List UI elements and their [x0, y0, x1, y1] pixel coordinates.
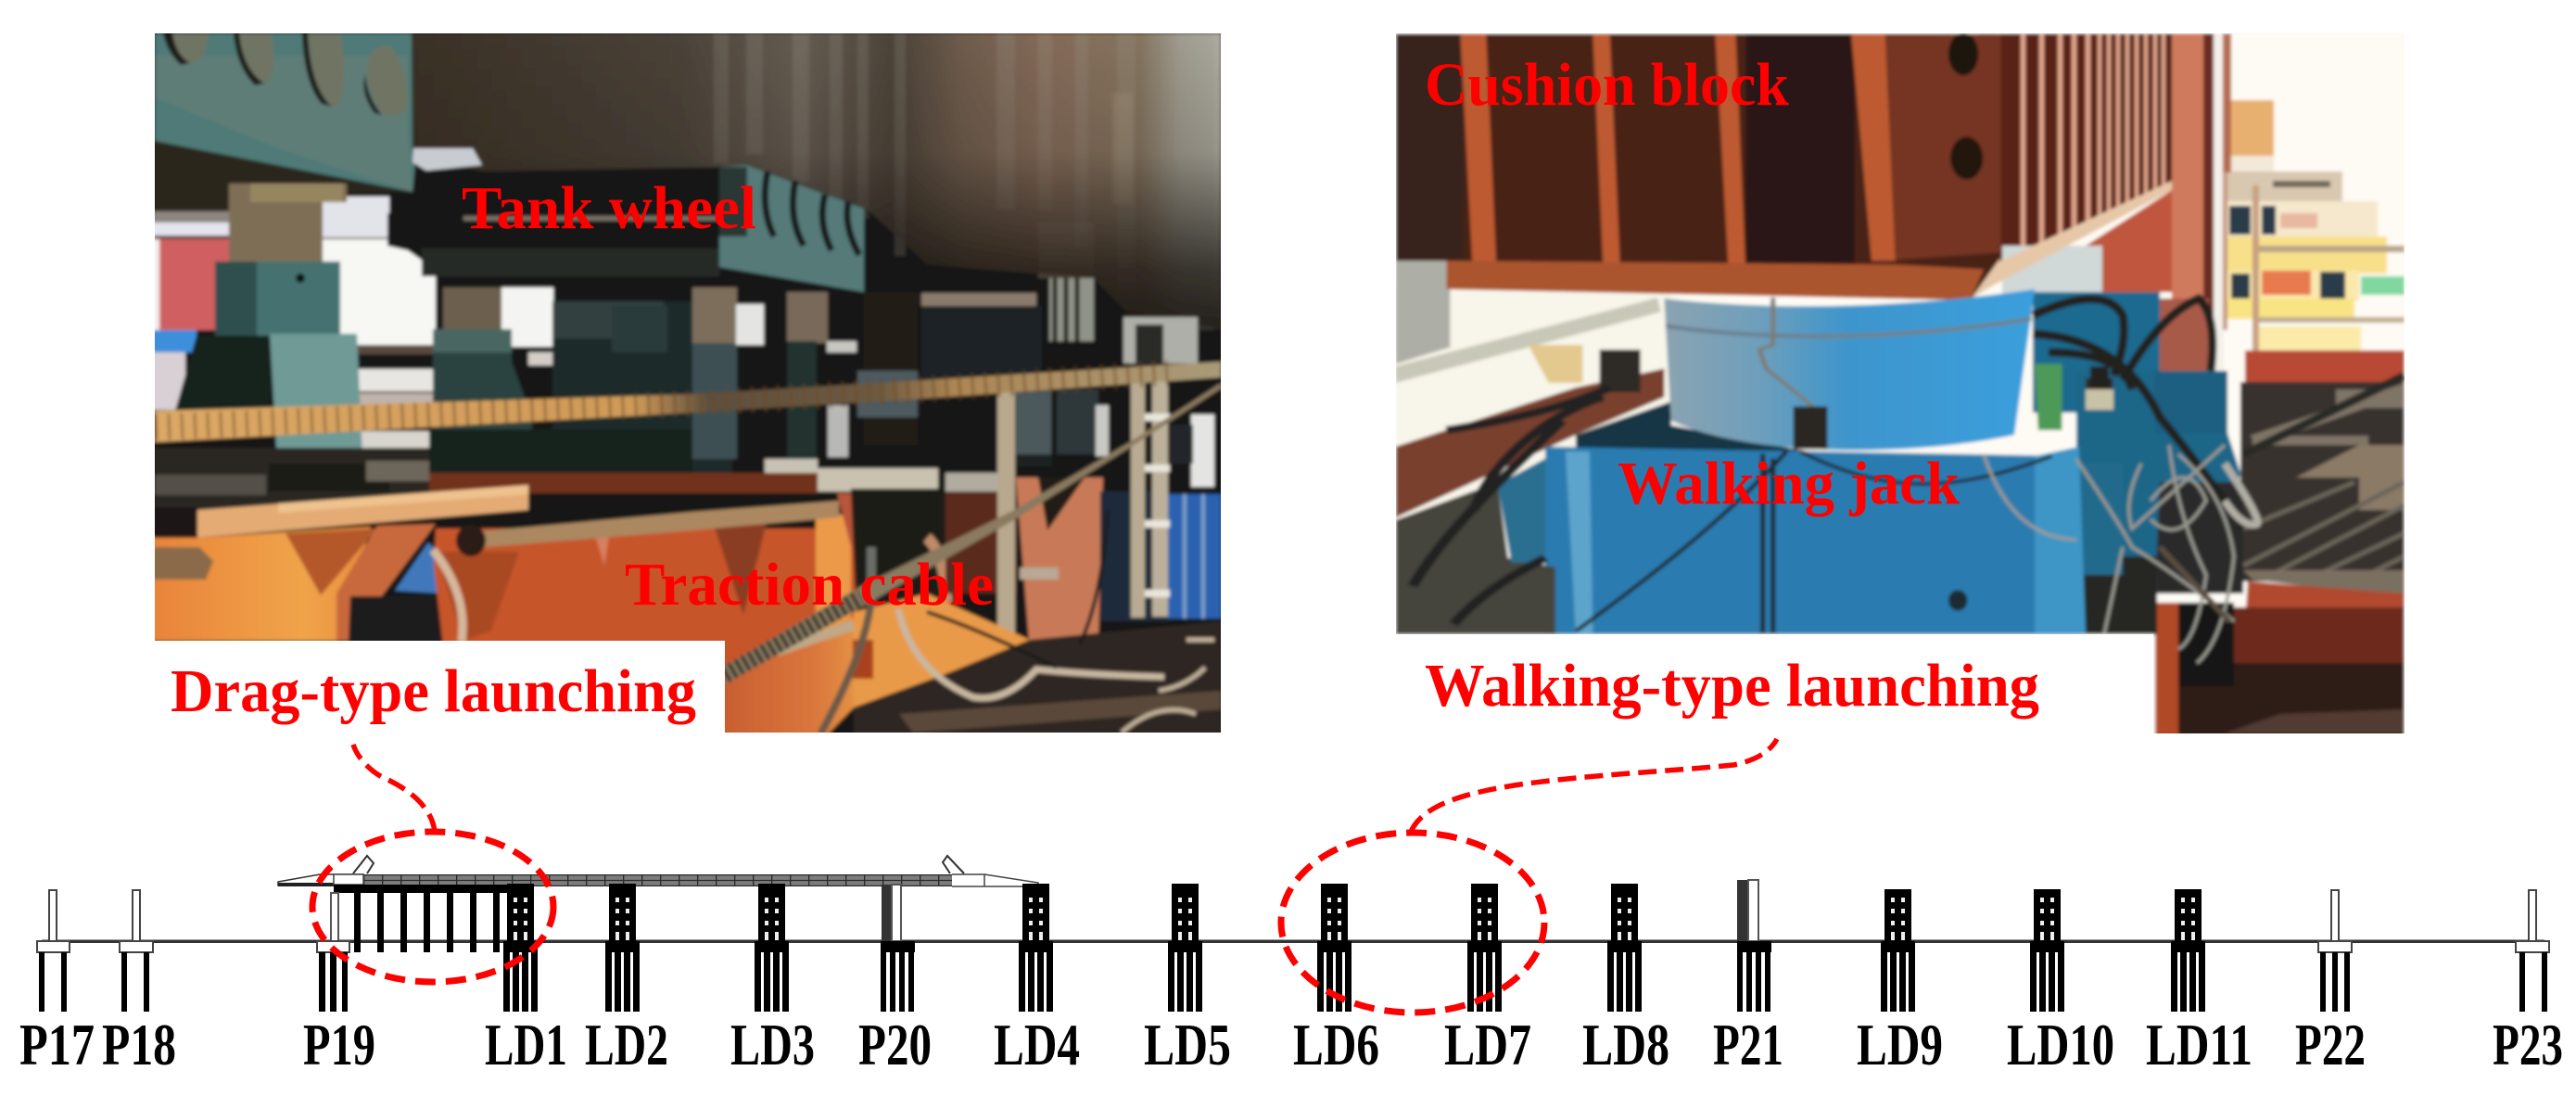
pier P20: P20 — [858, 1013, 932, 1077]
pier LD7: LD7 — [1444, 1013, 1531, 1077]
pier LD4: LD4 — [994, 1013, 1080, 1077]
pier LD6: LD6 — [1293, 1013, 1379, 1077]
pier LD5 — [1144, 884, 1231, 1077]
callout: walking-type circle and leader — [1281, 739, 1777, 1013]
pier LD5: LD5 — [1144, 1013, 1231, 1077]
pier P22: P22 — [2295, 1013, 2366, 1077]
bridge elevation diagram — [19, 856, 2563, 1077]
pier LD11 — [2146, 889, 2252, 1077]
panel: walking-type launching photo — [1390, 28, 2410, 742]
pier P21: P21 — [1713, 1013, 1783, 1077]
deck and launching nose — [278, 856, 1038, 893]
pier P19 — [303, 893, 375, 1077]
pier LD9 — [1857, 889, 1943, 1077]
heading: drag-type launching: Drag-type launching — [171, 657, 696, 725]
pier P21 — [1713, 880, 1783, 1077]
callout: drag-type circle and leader — [312, 745, 553, 982]
pier LD8 — [1582, 884, 1669, 1077]
pier LD8: LD8 — [1582, 1013, 1669, 1077]
pier P17 — [19, 890, 95, 1077]
pier P23 — [2493, 890, 2563, 1077]
pier LD11: LD11 — [2146, 1013, 2252, 1077]
ground line — [42, 940, 2544, 943]
panel: drag-type launching photo — [148, 28, 1228, 742]
pier LD1 — [485, 884, 567, 1077]
pier LD4 — [994, 884, 1080, 1077]
pier P19: P19 — [303, 1013, 375, 1077]
pier LD3 — [730, 884, 815, 1077]
pier LD3: LD3 — [730, 1013, 815, 1077]
label: cushion block: Cushion block — [1425, 51, 1789, 119]
pier P18: P18 — [102, 1013, 176, 1077]
pier P18 — [102, 890, 176, 1077]
pier LD10 — [2007, 889, 2114, 1077]
temporary supports — [354, 890, 500, 952]
pier LD2: LD2 — [585, 1013, 668, 1077]
pier LD7 — [1444, 884, 1531, 1077]
pier LD1: LD1 — [485, 1013, 567, 1077]
pier P17: P17 — [19, 1013, 95, 1077]
pier P22 — [2295, 890, 2366, 1077]
pier LD10: LD10 — [2007, 1013, 2114, 1077]
pier LD6 — [1293, 884, 1379, 1077]
label: tank wheel: Tank wheel — [462, 174, 756, 242]
label: walking jack: Walking jack — [1618, 450, 1960, 517]
heading: walking-type launching: Walking-type launching — [1425, 652, 2039, 720]
pier P20 — [858, 885, 932, 1077]
label: traction cable: Traction cable — [625, 551, 994, 618]
pier LD2 — [585, 884, 668, 1077]
pier LD9: LD9 — [1857, 1013, 1943, 1077]
